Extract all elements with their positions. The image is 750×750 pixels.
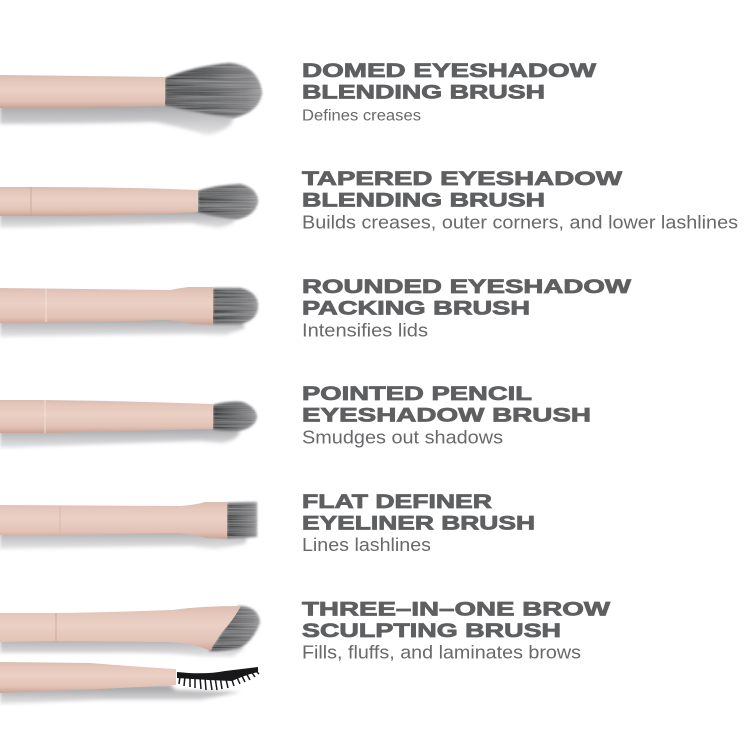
spoolie end <box>0 662 259 704</box>
text: three-in-one brow sculpting brush <box>302 598 611 662</box>
heading <box>302 276 632 320</box>
description: Lines lashlines <box>302 535 431 555</box>
heading: PACKING BRUSH <box>302 298 530 320</box>
brush: pointed pencil eyeshadow <box>0 400 257 448</box>
heading: THREE–IN–ONE BROW <box>302 598 611 620</box>
heading: BLENDING BRUSH <box>302 82 545 104</box>
text: tapered eyeshadow blending brush <box>302 168 738 232</box>
brush: three-in-one brow sculpting <box>0 606 260 704</box>
heading: TAPERED EYESHADOW <box>302 168 623 190</box>
description: Builds creases, outer corners, and lower lashlines <box>302 212 738 232</box>
text: rounded eyeshadow packing brush <box>302 276 632 340</box>
description: Fills, fluffs, and laminates brows <box>302 642 581 662</box>
heading: EYELINER BRUSH <box>302 512 535 534</box>
heading <box>302 60 597 104</box>
description: Smudges out shadows <box>302 428 503 448</box>
heading: BLENDING BRUSH <box>302 190 545 212</box>
brush: tapered eyeshadow blending <box>0 184 258 228</box>
description: Defines creases <box>302 108 421 124</box>
text: pointed pencil eyeshadow brush <box>302 383 591 448</box>
heading <box>302 598 611 642</box>
heading <box>302 491 535 534</box>
heading: POINTED PENCIL <box>302 383 532 405</box>
brush: rounded eyeshadow packing <box>0 287 258 337</box>
text: domed eyeshadow blending brush <box>302 60 597 124</box>
heading: ROUNDED EYESHADOW <box>302 276 632 298</box>
heading: DOMED EYESHADOW <box>302 60 597 82</box>
heading <box>302 383 591 426</box>
heading: FLAT DEFINER <box>302 491 492 513</box>
text: flat definer eyeliner brush <box>302 491 535 555</box>
heading: SCULPTING BRUSH <box>302 620 561 642</box>
heading: EYESHADOW BRUSH <box>302 404 591 426</box>
description: Intensifies lids <box>302 320 428 340</box>
heading <box>302 168 623 212</box>
sculpting end <box>0 606 260 657</box>
brush: domed eyeshadow blending <box>0 63 262 135</box>
brush: flat definer eyeliner <box>0 502 257 549</box>
